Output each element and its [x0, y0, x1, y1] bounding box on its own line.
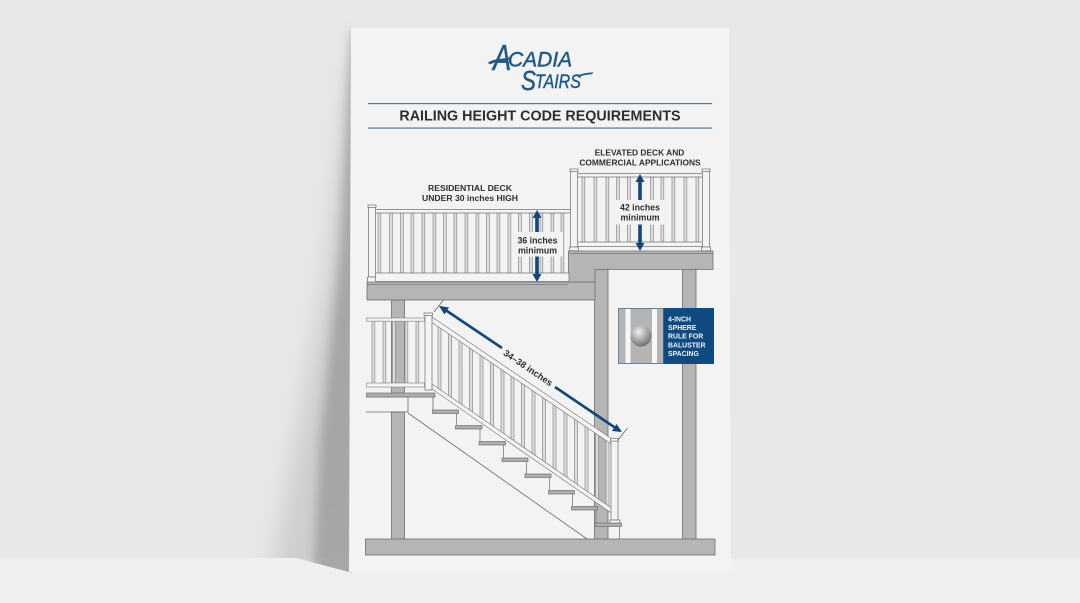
callout: 4-inch sphere rule — [618, 308, 714, 364]
logo: Acadia Stairs: CADIA — [508, 48, 572, 72]
dimension: 36 inches minimum: 36 inches — [517, 236, 558, 246]
heading: residential deck: RESIDENTIAL DECK — [428, 183, 513, 193]
risers — [456, 413, 620, 539]
callout: 4-inch sphere rule: BALUSTER — [668, 342, 706, 349]
residential railing — [368, 205, 571, 282]
stair posts — [424, 313, 620, 523]
elevated railing — [570, 169, 710, 251]
title: RAILING HEIGHT CODE REQUIREMENTS — [399, 108, 681, 124]
dimension: 34–38 inches — [434, 300, 628, 440]
dimension: 42 inches minimum: 42 inches — [620, 202, 660, 212]
callout: 4-inch sphere rule: 4-INCH — [668, 316, 691, 324]
structure posts and decks — [366, 251, 715, 555]
callout: 4-inch sphere rule: RULE FOR — [668, 334, 703, 341]
logo: Acadia Stairs: S — [521, 66, 536, 97]
heading: residential deck: UNDER 30 inches HIGH — [422, 193, 518, 203]
dimension: 42 inches minimum: minimum — [620, 213, 660, 223]
callout: 4-inch sphere rule: SPHERE — [668, 325, 697, 332]
landing railing — [366, 318, 424, 387]
floor — [0, 558, 1080, 603]
lower deck — [367, 282, 595, 300]
dimension: 36 inches minimum — [516, 210, 563, 282]
icon: sphere — [630, 326, 652, 346]
dimension: 36 inches minimum: minimum — [518, 246, 557, 256]
logo: Acadia Stairs — [488, 37, 593, 97]
poster shadow — [268, 27, 352, 572]
treads — [366, 393, 622, 526]
dimension: 42 inches minimum — [613, 174, 668, 251]
logo: Acadia Stairs: A — [491, 37, 511, 78]
base slab — [366, 539, 715, 555]
landing fascia — [366, 397, 587, 539]
stair railing — [432, 317, 612, 514]
upper deck — [568, 251, 713, 282]
logo: Acadia Stairs: TAIRS — [535, 71, 581, 92]
heading: elevated deck: COMMERCIAL APPLICATIONS — [579, 158, 701, 168]
dimension: 34–38 inches: 34–38 inches — [501, 348, 555, 388]
poster sheet — [349, 28, 731, 572]
staircase — [366, 393, 622, 539]
callout: 4-inch sphere rule: SPACING — [668, 351, 699, 358]
heading: elevated deck: ELEVATED DECK AND — [595, 148, 684, 158]
